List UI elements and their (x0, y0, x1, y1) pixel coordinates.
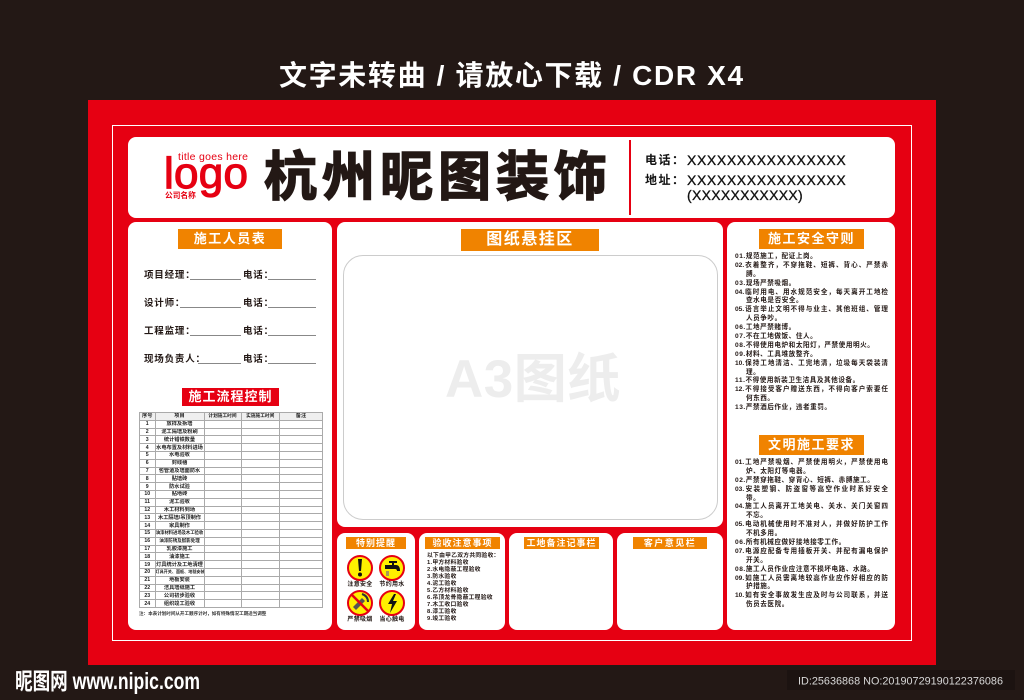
process table: 水电验收 (169, 452, 190, 458)
process table: 序号 (142, 413, 152, 419)
process table: 油漆材料进场及木工验收 (156, 530, 203, 535)
heading: safety rules: 施工安全守则 (768, 231, 855, 246)
process table: 泥工验收 (169, 499, 190, 505)
process table: 封线槽 (172, 460, 187, 466)
process table: 22 (144, 585, 150, 591)
contact info: (XXXXXXXXXXX) (687, 187, 803, 203)
safety rules list: 何东西。 (746, 395, 775, 402)
caption: font note: 文字未转曲 / 请放心下载 / CDR X4 (279, 60, 745, 91)
safety rules list: 膊。 (746, 271, 760, 278)
safety rules list: 02.衣着整齐，不穿拖鞋、短裤、背心、严禁赤 (735, 262, 888, 269)
process table: 15 (144, 530, 150, 536)
heading: safety rules (759, 229, 864, 249)
civilized construction list: 不机多用。 (746, 530, 782, 537)
process table: 计划施工时间 (208, 413, 237, 418)
process table: 灯具统计及工地清理 (156, 562, 203, 568)
process table: 统计错铁数量 (164, 437, 195, 443)
process table: 4 (146, 445, 149, 451)
heading: special notice (346, 537, 406, 549)
panel: site notes (509, 533, 613, 630)
board: red background (88, 100, 936, 665)
contact info: XXXXXXXXXXXXXXXX (687, 152, 846, 168)
safety rules list: 理。 (746, 369, 760, 376)
label: no smoking: 严禁吸烟 (347, 617, 373, 623)
watermark: image id: ID:25636868 NO:20190729190122376086 (798, 676, 1003, 688)
panel: acceptance (419, 533, 505, 630)
safety rules list: 11.不得使用新装卫生洁具及其他设备。 (735, 377, 860, 384)
process table: 木工隔墙/吊顶制作 (158, 515, 201, 521)
process table: 地板安装 (169, 577, 190, 583)
process table: 18 (144, 554, 150, 560)
personnel row 3 (144, 326, 316, 337)
civilized construction list: 01.工地严禁吸烟、严禁使用明火，严禁使用电 (735, 459, 888, 466)
watermark: site brand: 昵图网 www.nipic.com (15, 668, 200, 694)
heading: civilized construction: 文明施工要求 (768, 437, 855, 452)
heading: drawing area: 图纸悬挂区 (486, 231, 574, 248)
personnel row 3: 电话： (243, 326, 274, 337)
safety rules list: 人员争吵。 (746, 315, 782, 322)
table note: 注：本表计划时间从开工顺序计时，如有特殊情况工期适当调整 (139, 611, 266, 616)
civilized construction list: 开关。 (746, 557, 767, 564)
process table: 水电布置及材料进场 (156, 445, 203, 451)
safety rules list: 05.语言举止文明不得与业主、其他班组、管理 (735, 306, 888, 313)
icon: save water (379, 555, 405, 581)
icon: no smoking (347, 590, 373, 616)
process table: 7 (146, 468, 149, 474)
civilized construction list: 06.所有机械应做好接地接零工作。 (735, 539, 846, 546)
personnel row 2 (144, 298, 316, 309)
watermark: A3: A3图纸 (445, 350, 621, 409)
process table: 8 (146, 476, 149, 482)
process table: 3 (146, 437, 149, 443)
heading: process control: 施工流程控制 (188, 389, 272, 404)
civilized construction list (735, 458, 888, 608)
acceptance list (427, 552, 500, 622)
process table: 家具制作 (169, 523, 190, 529)
personnel row 4: 电话： (243, 354, 274, 365)
acceptance list: 5.乙方材料验收 (427, 588, 469, 594)
civilized construction list: 不忘。 (746, 512, 767, 519)
panel: header (128, 137, 895, 218)
process table: 灯具开关、面板、地毯安装 (156, 569, 204, 574)
civilized construction list: 05.电动机械使用时不准对人，并做好防护工作 (735, 521, 888, 528)
process table: 防水试验 (169, 484, 190, 490)
civilized construction list: 09.如施工人员需离地较高作业应作好相应的防 (735, 575, 888, 582)
acceptance list: 2.水电隐蔽工程验收 (427, 567, 481, 573)
safety rules list: 04.临时用电、用水规范安全，每天离开工地检 (735, 289, 888, 296)
civilized construction list: 08.施工人员作业应注意不损坏电路、水路。 (735, 566, 874, 573)
process table: 16 (144, 538, 150, 544)
heading: customer feedback: 客户意见栏 (644, 538, 696, 548)
acceptance list: 9.竣工验收 (427, 616, 457, 622)
heading: customer feedback (633, 537, 707, 549)
process table (139, 412, 323, 608)
acceptance list: 以下由甲乙双方共同验收： (427, 553, 500, 559)
process table: 油漆防锈及腻影处理 (159, 538, 200, 543)
civilized construction list: 10.如有安全事故发生应及时与公司联系，并送 (735, 592, 888, 599)
panel: special notice (337, 533, 415, 630)
civilized construction list: 护措施。 (746, 583, 775, 590)
heading: civilized construction (759, 435, 864, 455)
process table: 5 (146, 452, 149, 458)
personnel row 4 (144, 354, 316, 365)
personnel row 2: 设计师： (144, 298, 185, 309)
acceptance list: 3.防水验收 (427, 574, 457, 580)
heading: personnel table (178, 229, 282, 249)
process table: 23 (144, 593, 150, 599)
panel: personnel and process (128, 222, 332, 630)
process table: 泥工隔墙及粉刷 (161, 429, 198, 435)
process table: 实施施工时间 (246, 413, 274, 418)
personnel row 2: 电话： (243, 298, 274, 309)
icon: electric shock (379, 590, 405, 616)
process table: 14 (144, 523, 150, 529)
panel: rules (727, 222, 895, 630)
title: 杭州昵图装饰 (264, 148, 612, 207)
logo: logo (164, 149, 248, 198)
process table: 洁具墙纸施工 (164, 585, 195, 591)
contact info (645, 152, 846, 204)
logo: title goes here (178, 151, 248, 163)
heading: personnel table: 施工人员表 (194, 231, 266, 246)
acceptance list: 4.泥工验收 (427, 581, 457, 587)
process table: 9 (146, 484, 149, 490)
process table: 21 (144, 577, 150, 583)
contact info: XXXXXXXXXXXXXXXX (687, 172, 846, 188)
civilized construction list: 07.电源应配备专用插板开关、并配有漏电保护 (735, 548, 888, 555)
safety rules list: 查水电是否安全。 (746, 297, 803, 304)
process table: 组织竣工验收 (164, 601, 195, 607)
process table: 24 (144, 601, 150, 607)
label: attention: 注意安全 (347, 582, 373, 588)
safety rules list: 13.严禁酒后作业，违者重罚。 (735, 404, 832, 411)
divider (629, 140, 631, 215)
process table: 12 (144, 507, 150, 513)
process table: 放样及拆墙 (167, 421, 192, 427)
safety rules list: 10.保持工地清洁、工完地清，垃圾每天袋装清 (735, 360, 888, 367)
civilized construction list: 03.安装塑钢、防盗窗等高空作业时系好安全 (735, 486, 888, 493)
panel: drawing hanging area (337, 222, 723, 527)
process table: 备注 (296, 413, 306, 419)
process table: 木工材料到场 (164, 507, 195, 513)
personnel row 3: 工程监理： (144, 326, 196, 337)
heading: special notice: 特别提醒 (356, 538, 396, 548)
process table: 项目 (174, 413, 185, 419)
safety rules list: 01.规范施工，配证上岗。 (735, 253, 817, 260)
label: electric shock: 当心触电 (379, 617, 405, 623)
contact info: 地址： (645, 173, 686, 187)
heading: drawing area (461, 229, 599, 251)
heading: acceptance (425, 537, 500, 549)
safety rules list: 12.不得接受客户赠送东西，不得向客户索要任 (735, 386, 888, 393)
acceptance list: 6.吊顶龙骨隐蔽工程验收 (427, 595, 493, 601)
safety rules list: 08.不得使用电炉和太阳灯，严禁使用明火。 (735, 342, 874, 349)
inner white frame (112, 125, 912, 641)
safety rules list: 03.现场严禁吸烟。 (735, 280, 796, 287)
process table: 17 (144, 546, 150, 552)
civilized construction list: 带。 (746, 495, 760, 502)
process table: 10 (144, 491, 150, 497)
safety rules list: 07.不在工地做饭、住人。 (735, 333, 817, 340)
process table: 1 (146, 421, 149, 427)
heading: acceptance: 验收注意事项 (432, 538, 492, 548)
process table: 公司初步验收 (164, 593, 195, 599)
contact info: 电话： (645, 153, 686, 167)
safety rules list: 06.工地严禁赌博。 (735, 324, 796, 331)
process table: 11 (144, 499, 150, 505)
personnel row 4: 现场负责人： (144, 354, 206, 365)
process table: 贴地砖 (172, 491, 187, 497)
heading: site notes: 工地备注记事栏 (526, 538, 596, 548)
icon: attention (347, 555, 373, 581)
civilized construction list: 02.严禁穿拖鞋、穿背心、短裤、赤膊施工。 (735, 477, 874, 484)
acceptance list: 8.漆工验收 (427, 609, 457, 615)
process table: 19 (144, 562, 150, 568)
acceptance list: 7.木工收口验收 (427, 602, 469, 608)
safety rules list (735, 252, 888, 411)
personnel row 1 (144, 270, 316, 281)
process table: 乳胶漆施工 (167, 546, 192, 552)
civilized construction list: 炉、太阳灯等电器。 (746, 468, 810, 475)
safety rules list: 09.材料、工具堆放整齐。 (735, 351, 817, 358)
process table: 油漆施工 (169, 554, 190, 560)
process table: 6 (146, 460, 149, 466)
watermark: image id (787, 670, 1015, 690)
process table: 包管道及墙面防水 (159, 468, 200, 474)
civilized construction list: 伤员去医院。 (746, 601, 789, 608)
personnel row 1: 电话： (243, 270, 274, 281)
process table: 贴墙砖 (172, 476, 187, 482)
label: save water: 节约用水 (379, 582, 405, 588)
process table: 13 (144, 515, 150, 521)
process table: 20 (144, 569, 150, 575)
panel: customer feedback (617, 533, 723, 630)
logo: 公司名称 (165, 190, 196, 201)
civilized construction list: 04.施工人员离开工地关电、关水、关门关窗四 (735, 503, 888, 510)
personnel row 1: 项目经理： (144, 270, 196, 281)
drawing frame (343, 255, 718, 520)
process table: 2 (146, 429, 149, 435)
acceptance list: 1.甲方材料验收 (427, 560, 469, 566)
